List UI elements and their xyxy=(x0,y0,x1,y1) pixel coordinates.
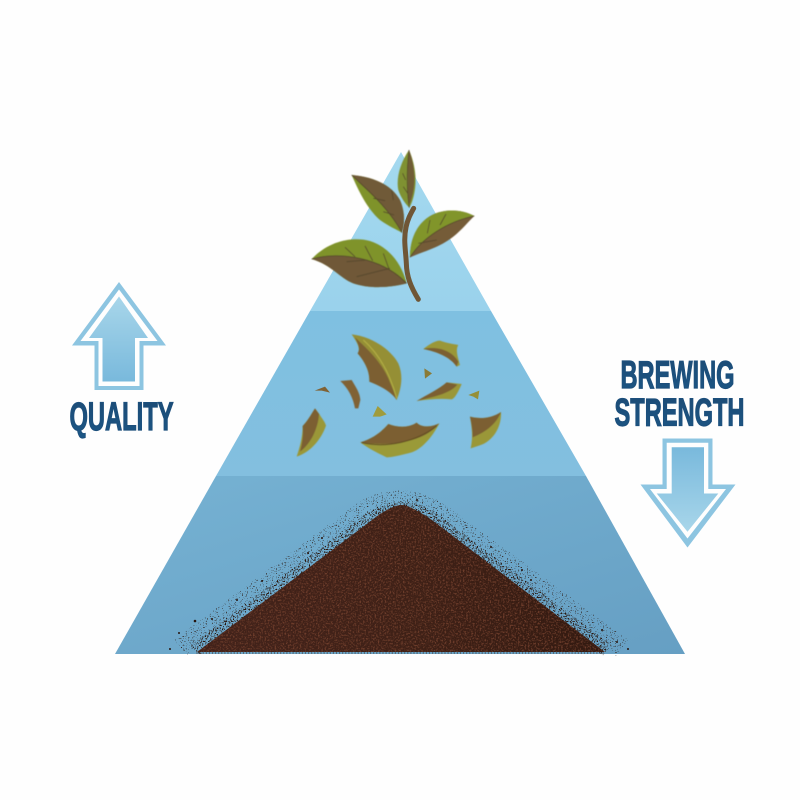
ground tea pile xyxy=(169,499,629,653)
fragment: large upper xyxy=(352,334,401,400)
icon: up arrow xyxy=(72,282,166,390)
bottom edge grains xyxy=(197,652,605,654)
pyramid xyxy=(115,152,685,654)
tea sprig: whole leaves xyxy=(312,150,474,299)
fragment: tiny left xyxy=(315,387,330,393)
fragment: small centre right xyxy=(424,368,432,379)
leaf: large lower left xyxy=(312,239,407,287)
leaf: top xyxy=(398,150,416,208)
fragment: upper right xyxy=(423,341,460,367)
fragment: bottom right xyxy=(470,412,501,448)
pyramid tier: bottom xyxy=(115,476,685,654)
pile body xyxy=(197,505,605,652)
fragment: tiny right xyxy=(468,391,479,399)
fragment: small centre xyxy=(373,406,387,417)
fragment: left middle xyxy=(340,380,360,408)
quality indicator xyxy=(70,282,174,439)
pyramid tier: top xyxy=(310,152,491,311)
leaf: right xyxy=(410,211,474,257)
pyramid tier: middle xyxy=(216,311,586,476)
icon: down arrow xyxy=(640,438,736,548)
leaf: upper left xyxy=(352,175,404,233)
stray grains xyxy=(169,499,629,650)
broken leaf fragments xyxy=(297,334,501,457)
scattered grounds: sparse fringe xyxy=(180,500,622,648)
label: quality: QUALITY xyxy=(70,395,174,439)
stem xyxy=(405,208,418,299)
fragment: middle right xyxy=(417,382,462,401)
brewing strength indicator xyxy=(614,354,744,548)
scattered grounds: dense fringe xyxy=(195,508,607,650)
fragment: lower left xyxy=(297,408,326,457)
fragment: bottom centre xyxy=(360,423,439,457)
